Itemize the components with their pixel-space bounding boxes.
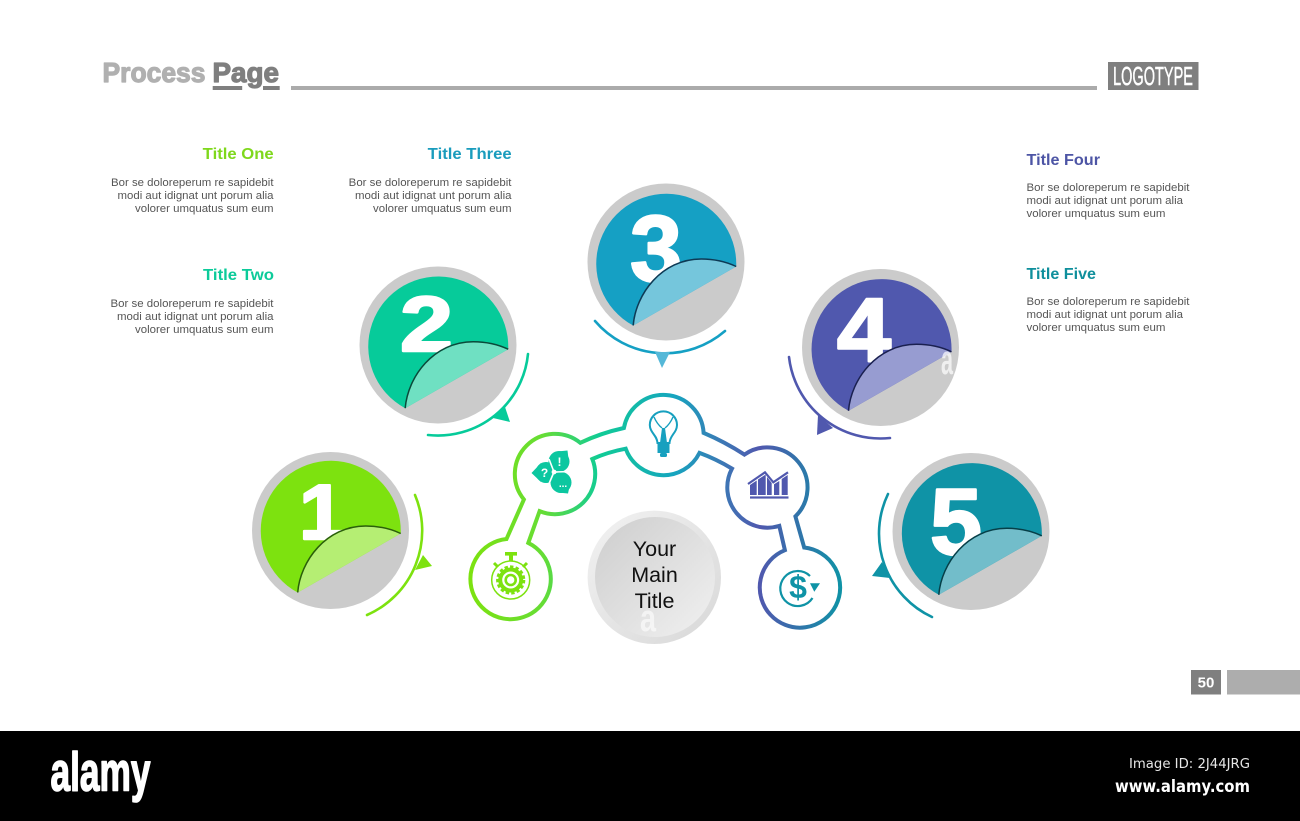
text block: title three: Title Three [428, 146, 512, 163]
text block: title four [1026, 152, 1190, 220]
connected chain outline [470, 395, 840, 628]
header title: Process [102, 57, 206, 88]
step 1 arc pointer [367, 495, 432, 615]
step 2 arc pointer [428, 354, 528, 436]
page number: 50 [1198, 674, 1214, 692]
icon: speech bubbles: ! [558, 455, 562, 469]
icon: dollar with circular arrow [780, 569, 820, 606]
center disc: your main title: Main [631, 563, 678, 587]
step 5 arc pointer [872, 494, 932, 617]
text block: title four: modi aut idignat unt porum alia [1026, 195, 1184, 207]
step 1 badge: 1 [299, 468, 345, 556]
text block: title five: volorer umquatus sum eum [1026, 322, 1166, 334]
center disc: your main title [588, 511, 721, 644]
text block: title one: volorer umquatus sum eum [135, 203, 274, 215]
text block: title three [349, 146, 512, 215]
step 4 badge: 4 [837, 281, 891, 381]
text block: title five: Title Five [1026, 266, 1096, 283]
step 4 badge [802, 269, 959, 426]
icon: stopwatch gear [492, 552, 530, 599]
text block: title five [1026, 266, 1190, 334]
text block: title three: Bor se doloreperum re sapidebit [349, 177, 512, 189]
center disc: your main title: Your [633, 537, 676, 561]
watermark footer band [0, 731, 1300, 821]
text block: title one: modi aut idignat unt porum alia [118, 190, 274, 202]
text block: title four: Bor se doloreperum re sapidebit [1026, 182, 1190, 194]
icon: speech bubbles: ? [541, 466, 548, 480]
logotype: LOGOTYPE [1113, 61, 1193, 91]
step 5 badge: 5 [930, 469, 982, 574]
icon: bar chart with trend line [748, 472, 788, 499]
text block: title two: volorer umquatus sum eum [135, 324, 274, 336]
page number [1191, 670, 1221, 694]
step 3 arc pointer [595, 321, 725, 368]
watermark letter on step 4: a [941, 336, 953, 383]
text block: title five: modi aut idignat unt porum alia [1026, 309, 1184, 321]
watermark footer band: Image ID: 2J44JRG [1129, 757, 1250, 772]
text block: title two [110, 267, 274, 336]
step 4 arc pointer [789, 357, 890, 439]
header title: Page [212, 57, 279, 88]
text block: title three: modi aut idignat unt porum alia [355, 190, 512, 202]
text block: title two: modi aut idignat unt porum alia [117, 311, 274, 323]
text block: title five: Bor se doloreperum re sapidebit [1026, 296, 1190, 308]
center disc: your main title: Title [635, 589, 674, 613]
step 2 badge: 2 [400, 280, 453, 368]
icon: dollar with circular arrow: $ [789, 569, 807, 605]
watermark footer band: alamy [50, 740, 151, 802]
watermark footer band: www.alamy.com [1115, 777, 1250, 797]
text block: title four: volorer umquatus sum eum [1026, 208, 1166, 220]
text block: title one: Bor se doloreperum re sapidebit [111, 177, 274, 189]
icon: speech bubbles: ... [559, 479, 567, 490]
step 3 badge: 3 [630, 196, 682, 301]
icon: speech bubbles [532, 450, 572, 494]
text block: title one [111, 146, 274, 215]
icon: light bulb [650, 411, 677, 457]
step 2 badge [360, 266, 516, 424]
text block: title two: Title Two [203, 267, 274, 284]
step 5 badge [892, 453, 1050, 610]
text block: title one: Title One [203, 146, 274, 163]
text block: title three: volorer umquatus sum eum [373, 203, 512, 215]
step 3 badge [588, 184, 744, 340]
header title [102, 57, 280, 90]
text block: title two: Bor se doloreperum re sapidebit [110, 298, 274, 310]
logotype [1108, 61, 1198, 91]
text block: title four: Title Four [1026, 152, 1100, 169]
step 1 badge [252, 452, 409, 609]
center disc: your main title: a [640, 598, 657, 640]
